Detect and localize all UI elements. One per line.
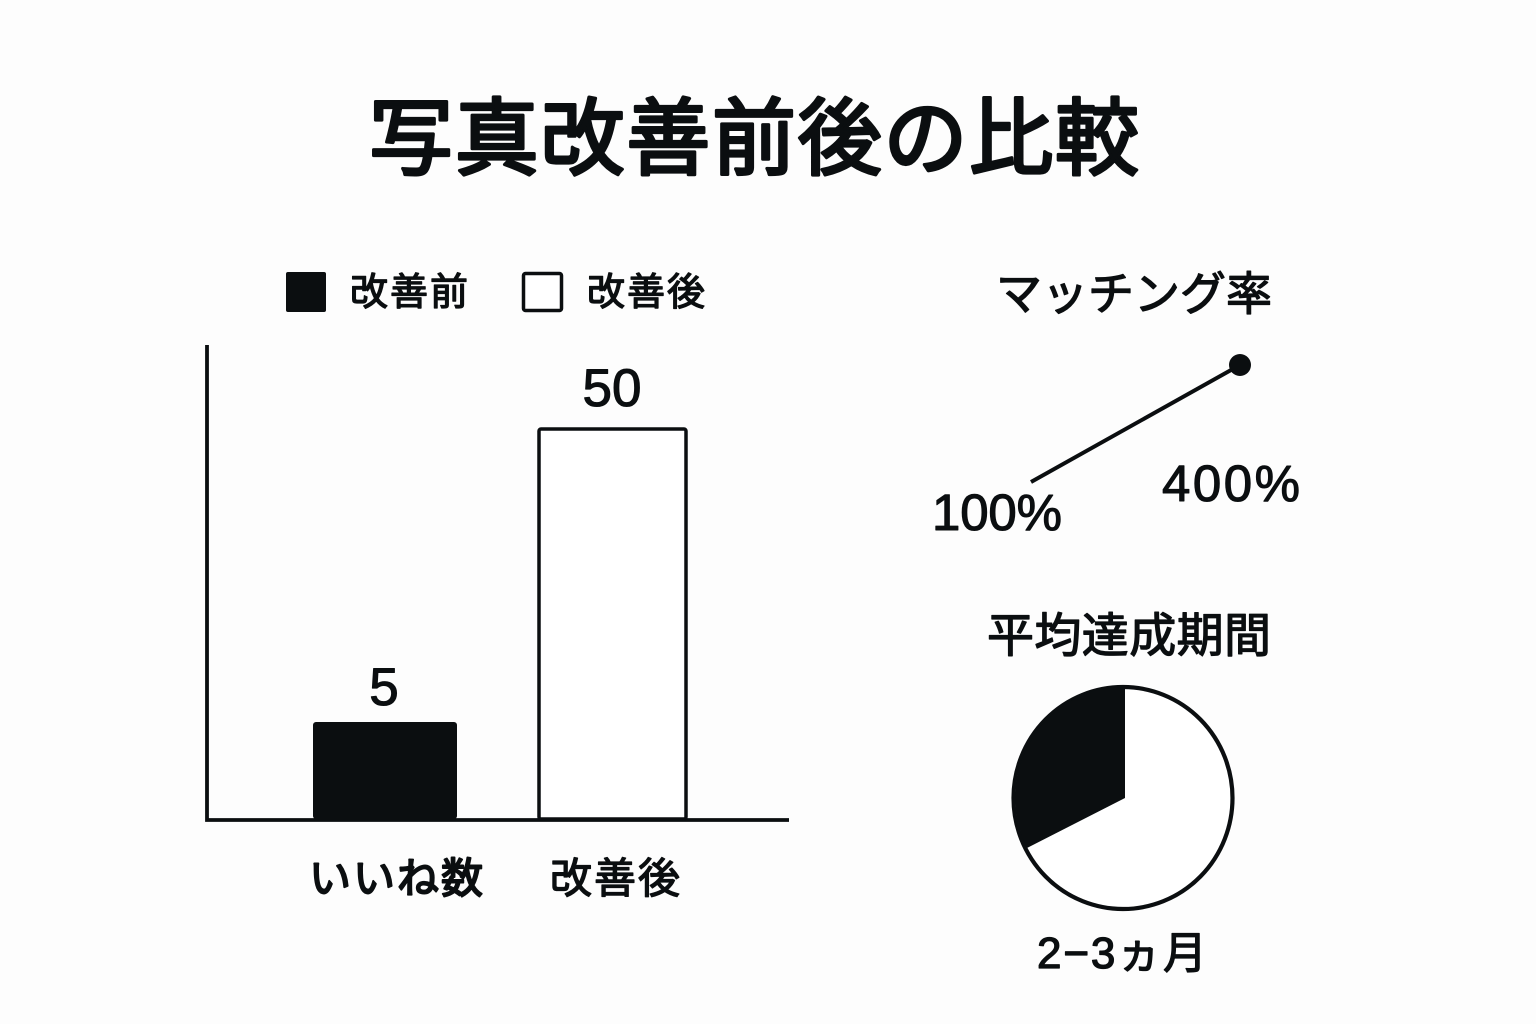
title: 写真改善前後の比較 [369, 92, 1139, 186]
bar: before [313, 722, 457, 819]
legend label: before: 改善前 [350, 272, 468, 314]
pie slice [1015, 686, 1125, 848]
pie base [1014, 687, 1232, 909]
end point [1229, 354, 1251, 376]
average period heading: 平均達成期間 [987, 609, 1271, 662]
pie chart [1014, 686, 1232, 909]
legend [286, 272, 705, 314]
trend line [1031, 365, 1240, 482]
legend swatch: before [286, 272, 326, 312]
matching rate heading: マッチング率 [996, 268, 1272, 320]
value: 100%: 100% [932, 484, 1062, 541]
bar: after [539, 429, 686, 819]
axis label: after: 改善後 [550, 855, 680, 902]
value: 50: 50 [583, 359, 641, 418]
axis label: likes: いいね数 [309, 855, 483, 902]
bar chart [207, 345, 789, 902]
period value: 2−3ヵ月 [1037, 929, 1207, 978]
legend label: after: 改善後 [587, 272, 705, 314]
value: 400%: 400% [1162, 455, 1300, 512]
chart axes [207, 345, 789, 820]
value: 5: 5 [369, 658, 399, 717]
line chart: matching rate [932, 354, 1300, 541]
legend swatch: after [524, 274, 562, 310]
